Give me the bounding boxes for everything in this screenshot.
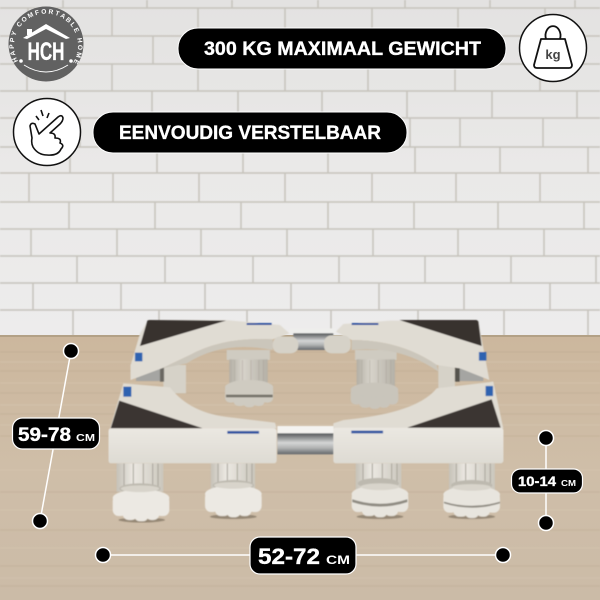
dimension: depth 59-78 cm: CM xyxy=(76,432,95,444)
front bar xyxy=(277,426,334,454)
dimension: depth 59-78 cm xyxy=(12,344,100,528)
product: adjustable washing machine stand xyxy=(108,320,503,522)
pill: 300 kg maximum weight: 300 KG MAXIMAAL GEWICHT xyxy=(204,39,481,60)
dimension: height 10-14 cm: 10-14 xyxy=(518,473,556,489)
front-right bracket xyxy=(333,382,503,463)
back legs xyxy=(225,350,398,409)
brick wall background xyxy=(0,0,600,337)
logo: Happy Comfortable Home: HAPPY COMFORTABLE HOME xyxy=(9,9,83,64)
back bar xyxy=(289,328,336,350)
side bars and side legs xyxy=(136,365,483,393)
dimension: width 52-72 cm: 52-72 xyxy=(258,544,320,569)
dimension: height 10-14 cm xyxy=(512,430,582,530)
front-left bracket xyxy=(108,383,277,463)
pill: easily adjustable: EENVOUDIG VERSTELBAAR xyxy=(119,123,381,144)
pill: easily adjustable xyxy=(93,112,407,153)
icon: finger snap hand xyxy=(14,98,80,166)
wooden floor xyxy=(0,335,600,600)
dimension: width 52-72 cm xyxy=(96,537,510,574)
dimension: height 10-14 cm: CM xyxy=(561,478,576,488)
back corner brackets xyxy=(131,320,489,380)
logo: Happy Comfortable Home: HCH xyxy=(28,38,64,66)
pill: 300 kg maximum weight xyxy=(178,28,506,69)
icon: kg weight xyxy=(520,14,586,82)
dimension: depth 59-78 cm: 59-78 xyxy=(18,425,71,446)
dimension: width 52-72 cm: CM xyxy=(326,553,350,567)
icon: kg weight: kg xyxy=(545,47,561,62)
front legs and feet xyxy=(113,463,500,522)
